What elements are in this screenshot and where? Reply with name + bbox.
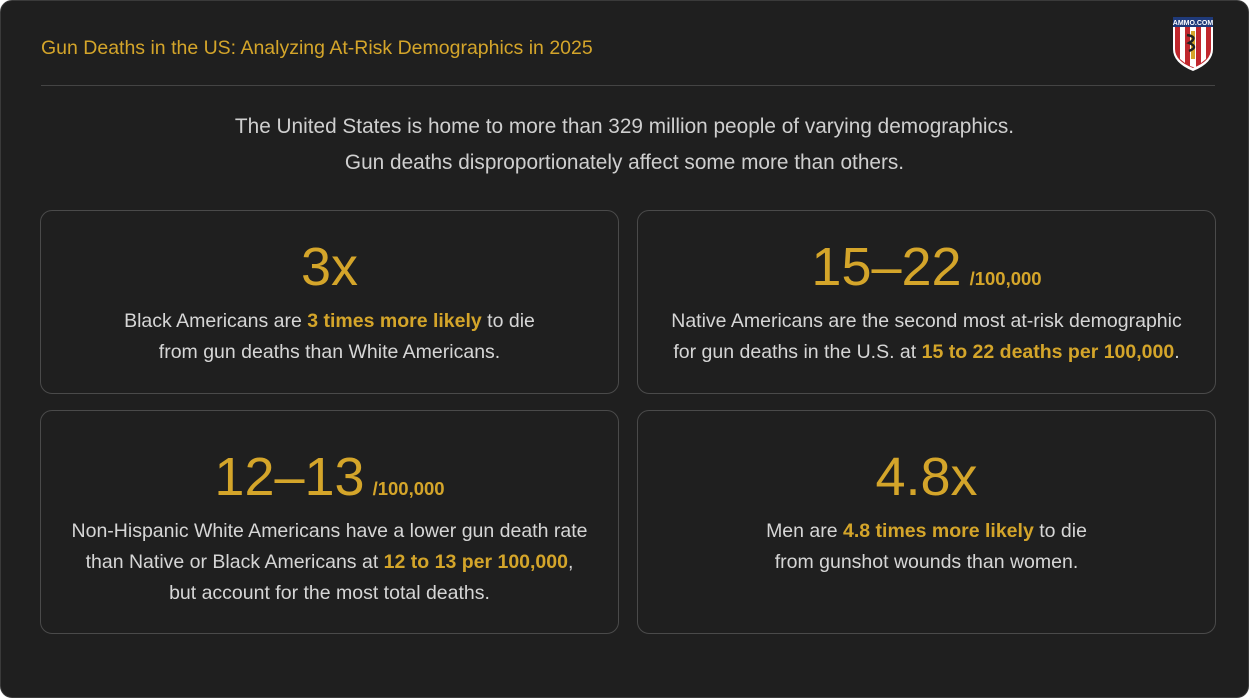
text: white americans: Non-Hispanic White Americans have a lower gun death rate bbox=[72, 520, 587, 542]
icon: ammo.com logo bbox=[1173, 17, 1213, 71]
text: black americans: from gun deaths than White Americans. bbox=[159, 341, 500, 363]
panel: men bbox=[637, 410, 1216, 634]
text: white americans: but account for the most total deaths. bbox=[169, 582, 490, 604]
text: men: from gunshot wounds than women. bbox=[775, 551, 1078, 573]
text: white americans bbox=[72, 520, 587, 604]
intro text bbox=[235, 115, 1014, 174]
text: native americans: Native Americans are the second most at-risk demographic bbox=[671, 310, 1182, 332]
stat: 3x: 3x bbox=[301, 237, 358, 297]
text: men bbox=[766, 520, 1087, 573]
panel: native americans bbox=[637, 210, 1216, 394]
intro text: The United States is home to more than 329 million people of varying demographics. bbox=[235, 115, 1014, 138]
stat: 4.8x: 4.8x bbox=[875, 447, 978, 507]
intro text: Gun deaths disproportionately affect some more than others. bbox=[345, 151, 904, 174]
text: black americans bbox=[124, 310, 535, 363]
text: native americans: for gun deaths in the U.S. at 15 to 22 deaths per 100,000. bbox=[673, 341, 1180, 363]
text: white americans: than Native or Black Americans at 12 to 13 per 100,000, bbox=[86, 551, 573, 573]
stat: 15-22: 15–22 /100,000 bbox=[811, 237, 1042, 297]
title: Gun Deaths in the US: Analyzing At-Risk Demographics in 2025 bbox=[41, 37, 593, 59]
text: native americans bbox=[671, 310, 1182, 363]
text: black americans: Black Americans are 3 times more likely to die bbox=[124, 310, 535, 332]
panel: black americans bbox=[40, 210, 619, 394]
text: men: Men are 4.8 times more likely to die bbox=[766, 520, 1087, 542]
panel: white americans bbox=[40, 410, 619, 634]
stat: 12-13: 12–13 /100,000 bbox=[214, 447, 445, 507]
icon: ammo.com logo: AMMO.COM bbox=[1173, 20, 1213, 27]
